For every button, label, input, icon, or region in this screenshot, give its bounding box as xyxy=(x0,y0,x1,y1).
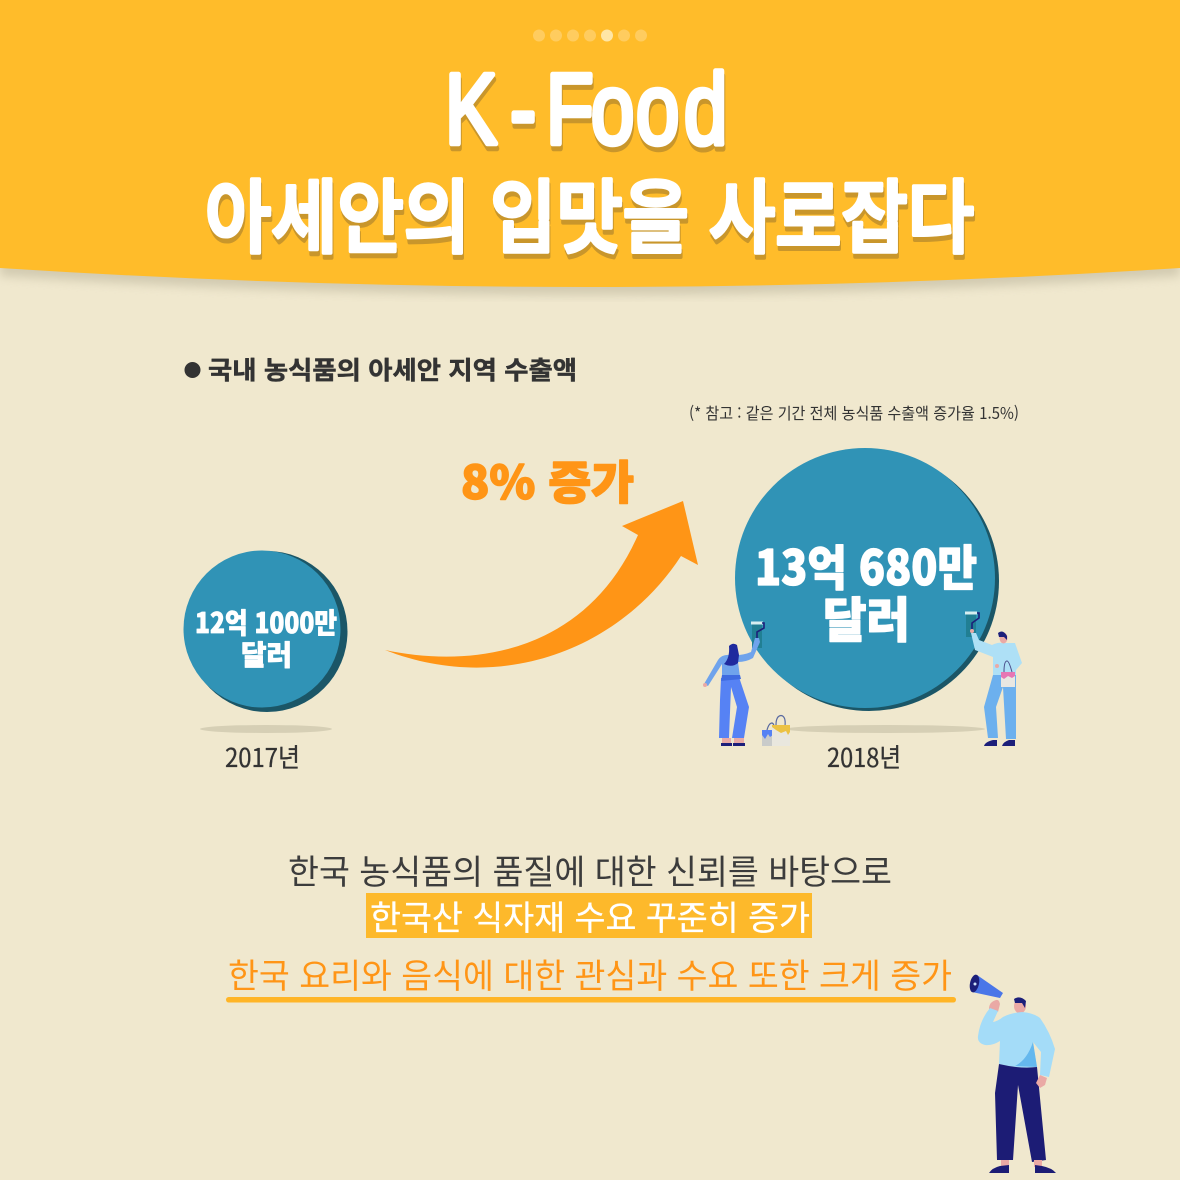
increase label: 8% 증가 xyxy=(461,447,634,513)
title: 아세안의 입맛을 사로잡다 xyxy=(206,159,975,275)
figure: woman painter xyxy=(703,622,764,746)
bubble 2017: 달러 xyxy=(241,634,292,674)
bubble 2018 xyxy=(735,448,999,711)
label 2018: 2018년 xyxy=(827,738,901,775)
page indicator dots xyxy=(533,30,647,42)
bubble 2018: 13억 680만 xyxy=(755,529,977,599)
title: K-Food xyxy=(445,54,727,166)
bubble 2018: 달러 xyxy=(823,581,910,651)
ground shadow 2018 xyxy=(785,725,985,733)
figure: man painter xyxy=(965,612,1022,746)
growth arrow xyxy=(385,501,698,668)
underlined orange text: 한국 요리와 음식에 대한 관심과 수요 또한 크게 증가 xyxy=(228,949,952,998)
bubble 2017 xyxy=(184,550,348,712)
highlighted text: 한국산 식자재 수요 꾸준히 증가 xyxy=(370,891,810,940)
ground shadow 2017 xyxy=(200,725,332,733)
reference note: (* 참고 : 같은 기간 전체 농식품 수출액 증가율 1.5%) xyxy=(689,400,1019,424)
bubble 2017: 12억 1000만 xyxy=(195,602,337,642)
header banner xyxy=(0,0,1180,295)
body text line 1: 한국 농식품의 품질에 대한 신뢰를 바탕으로 xyxy=(288,845,892,894)
label 2017: 2017년 xyxy=(225,738,300,775)
section heading: 국내 농식품의 아세안 지역 수출액 xyxy=(208,351,577,387)
title: 아세안의 입맛을 사로잡다 xyxy=(205,154,974,270)
title xyxy=(205,54,975,275)
title: K-Food xyxy=(446,59,728,171)
figure: man with megaphone xyxy=(968,974,1056,1173)
icon: paint buckets xyxy=(762,716,790,746)
